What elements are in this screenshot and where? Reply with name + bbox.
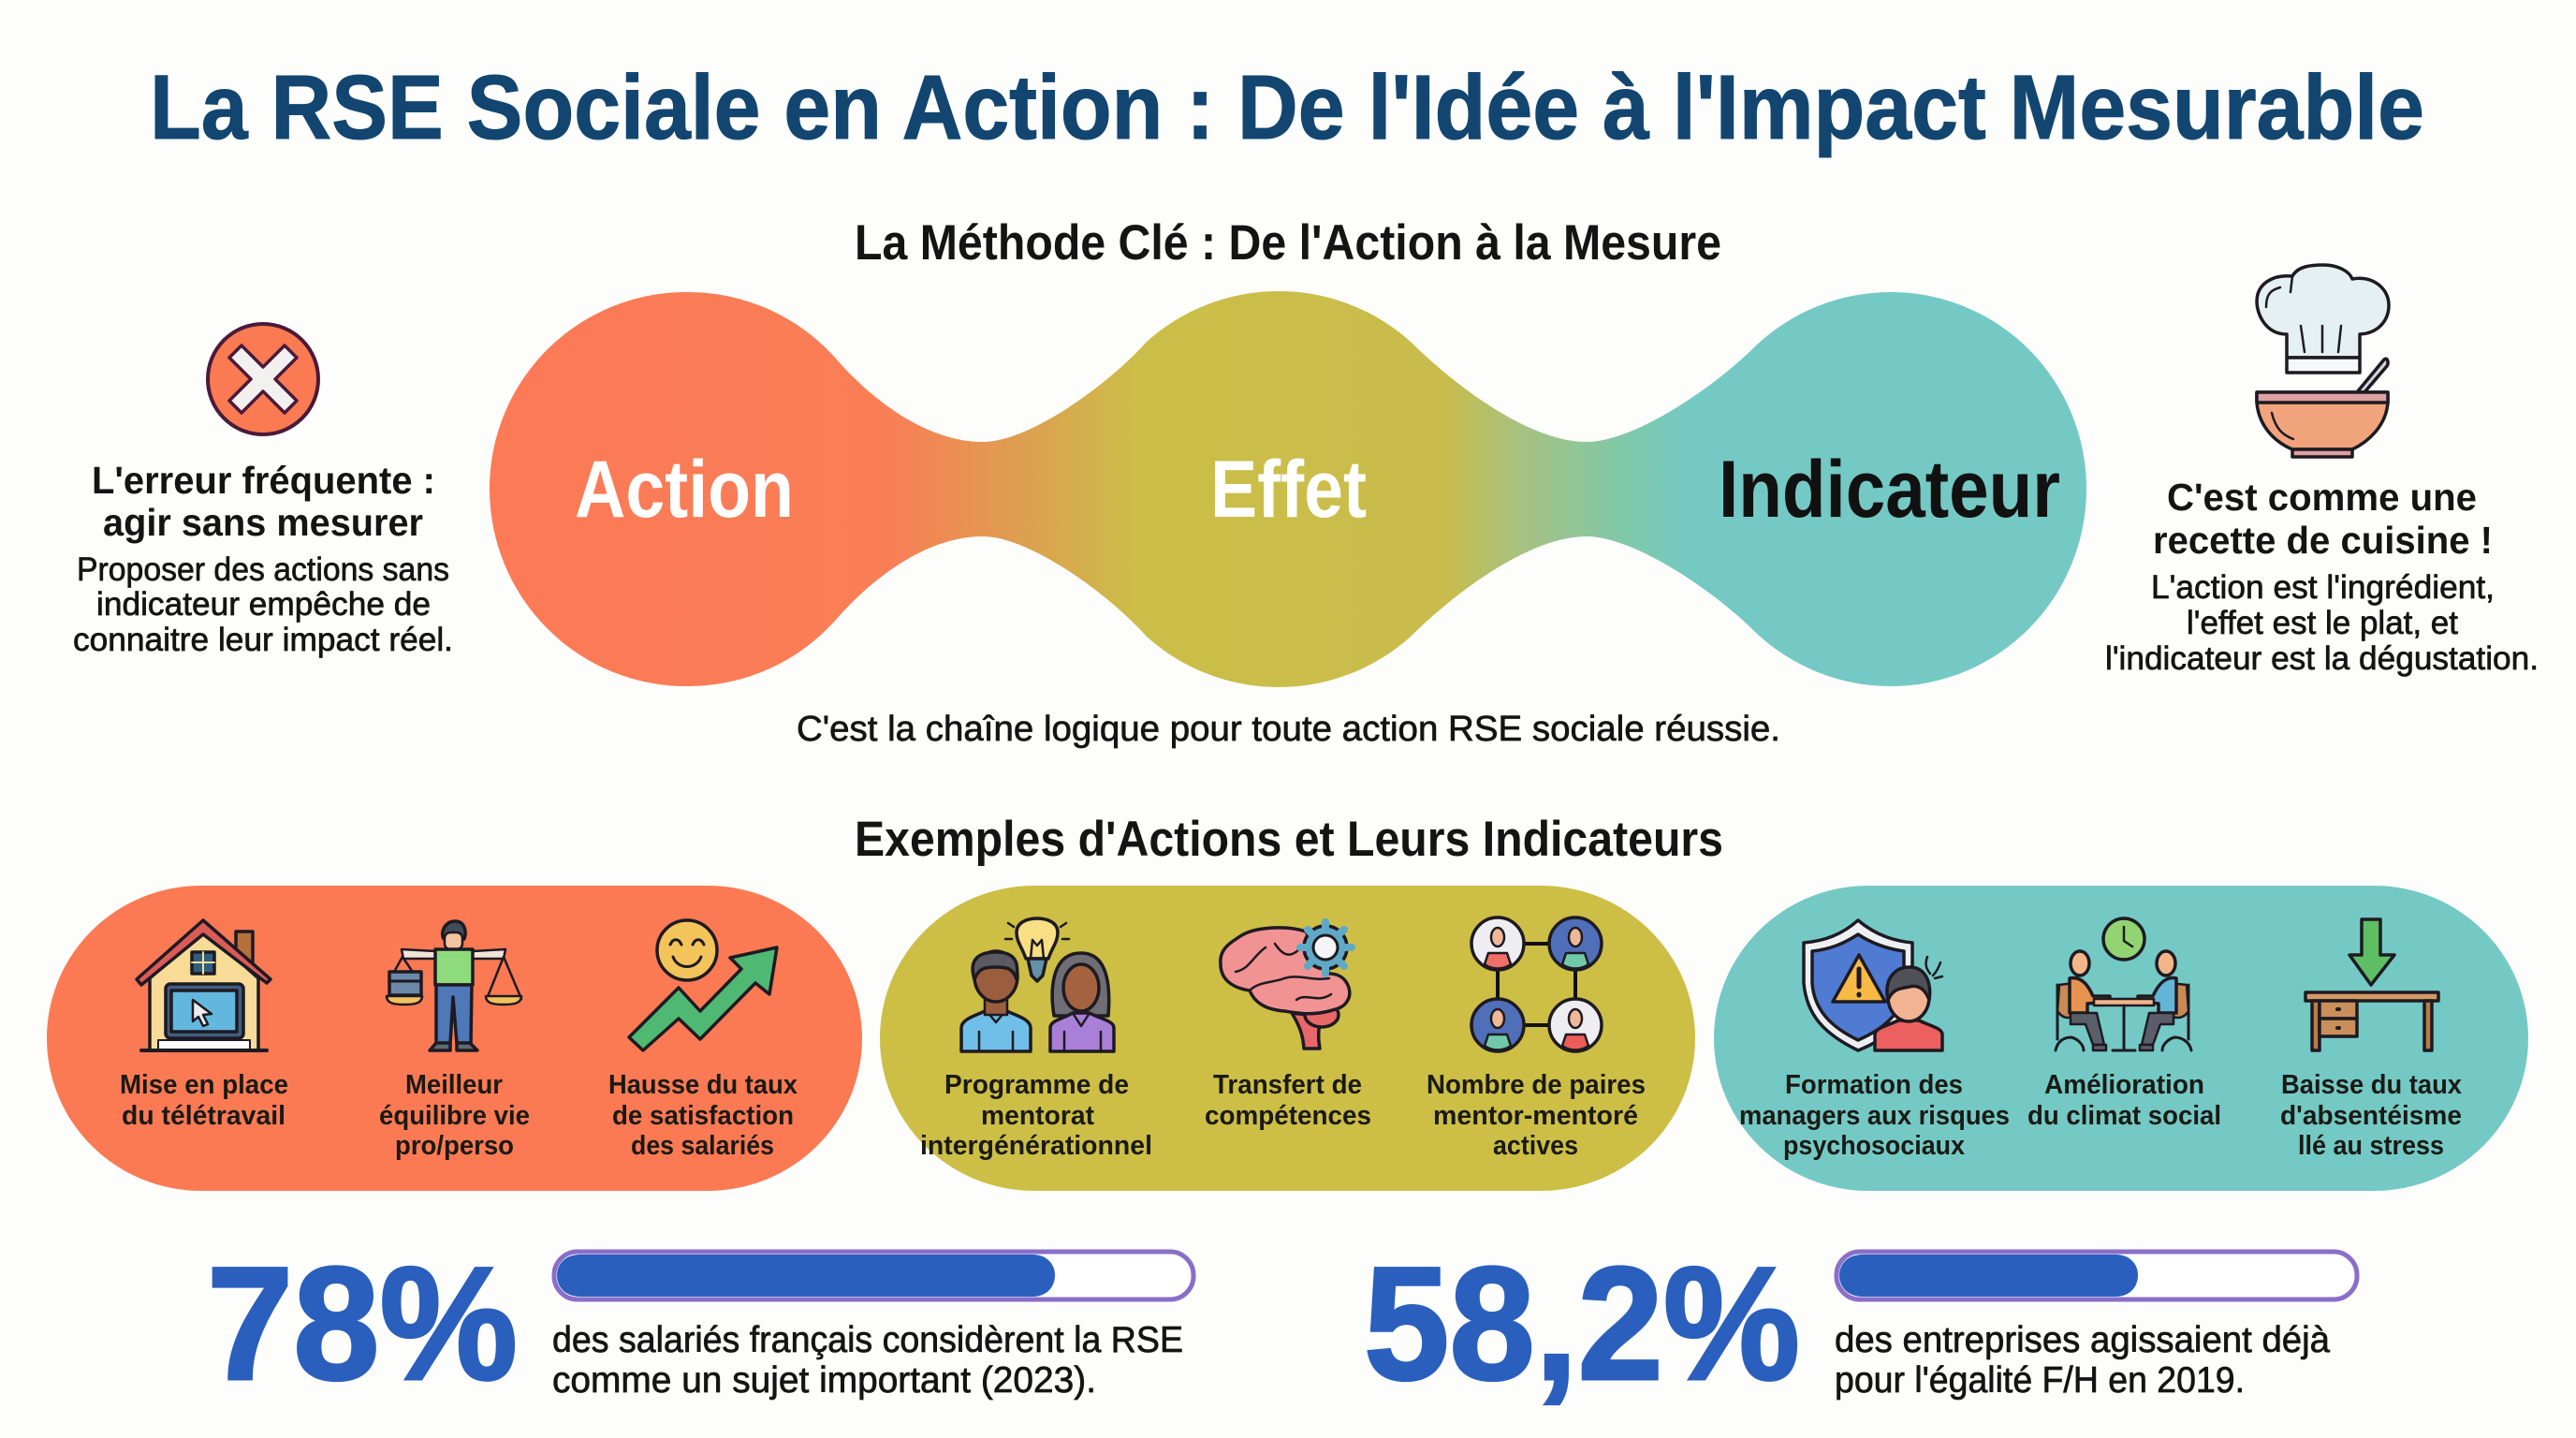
text: 78% description: comme un sujet important (2023). — [552, 1360, 1096, 1401]
label: mentoring programme: Programme de — [944, 1070, 1129, 1100]
progress bar: 78% — [554, 1252, 1193, 1299]
label: manager training — [1739, 1070, 2010, 1161]
title: La RSE Sociale en Action : De l'Idée à l'Impact Mesurable — [150, 56, 2424, 158]
label: action: Action — [575, 445, 794, 535]
label: work life balance: pro/perso — [395, 1131, 514, 1161]
label: manager training: Formation des — [1785, 1070, 1963, 1100]
panel: psychosocial risk example — [1714, 886, 2528, 1191]
label: mentoring programme: intergénérationnel — [920, 1131, 1152, 1161]
progress bar: 58,2% — [1837, 1252, 2357, 1299]
label: telework: du télétravail — [122, 1101, 285, 1131]
label: skills transfer — [1205, 1070, 1371, 1131]
label: satisfaction: Hausse du taux — [608, 1070, 798, 1100]
text: 78% description — [552, 1320, 1183, 1401]
number: 78%: 78% — [207, 1234, 518, 1414]
text: recipe description: L'action est l'ingrédient, — [2151, 569, 2495, 606]
label: satisfaction: de satisfaction — [612, 1101, 794, 1131]
text: recipe description — [2105, 569, 2539, 677]
chart: action effect indicator chain — [490, 291, 2086, 687]
icon: brain with gear — [1221, 922, 1352, 1049]
heading: error — [92, 459, 435, 544]
label: mentor pairs — [1427, 1070, 1646, 1161]
panel: mentoring example — [880, 886, 1695, 1191]
panel: telework example — [47, 886, 862, 1191]
label: telework — [120, 1070, 288, 1131]
label: work life balance: équilibre vie — [379, 1101, 530, 1131]
heading: examples: Exemples d'Actions et Leurs Indicateurs — [855, 812, 1723, 867]
panel: statistic 78 percent — [207, 1234, 1193, 1414]
label: mentoring programme: mentorat — [981, 1101, 1094, 1131]
icon: smiley and rising arrow — [629, 920, 777, 1050]
label: social climate — [2027, 1070, 2221, 1131]
label: manager training: managers aux risques — [1739, 1101, 2010, 1131]
label: work life balance — [379, 1070, 530, 1161]
icon: meeting at a table with clock — [2056, 918, 2191, 1050]
label: social climate: Amélioration — [2044, 1070, 2204, 1100]
text: 58,2% description — [1835, 1320, 2330, 1401]
text: error description — [73, 551, 453, 658]
label: effect: Effet — [1210, 445, 1367, 535]
heading: recipe: C'est comme une — [2167, 476, 2477, 519]
icon: house with laptop — [137, 920, 271, 1050]
label: indicator: Indicateur — [1719, 445, 2060, 535]
label: absenteeism — [2280, 1070, 2462, 1161]
label: mentor pairs: mentor-mentoré — [1433, 1101, 1638, 1131]
icon: down arrow and desk — [2305, 919, 2438, 1050]
text: 78% description: des salariés français considèrent la RSE — [552, 1320, 1183, 1360]
text: chain caption: C'est la chaîne logique pour toute action RSE sociale réussie. — [797, 710, 1780, 749]
text: recipe description: l'effet est le plat, et — [2187, 605, 2458, 641]
number: 58,2%: 58,2% — [1364, 1234, 1800, 1414]
label: mentor pairs: Nombre de paires — [1427, 1070, 1646, 1100]
panel: statistic 58,2 percent — [1364, 1234, 2357, 1414]
label: satisfaction — [608, 1070, 798, 1161]
heading: recipe: recette de cuisine ! — [2153, 519, 2493, 562]
label: mentor pairs: actives — [1493, 1131, 1578, 1161]
text: error description: connaitre leur impact réel. — [73, 622, 453, 658]
panel: common error — [73, 324, 453, 658]
label: skills transfer: Transfert de — [1213, 1070, 1362, 1100]
heading: recipe — [2153, 476, 2493, 562]
heading: error: L'erreur fréquente : — [92, 459, 435, 502]
label: satisfaction: des salariés — [631, 1131, 774, 1161]
icon: person balancing scales — [387, 921, 521, 1050]
text: error description: indicateur empêche de — [96, 586, 431, 623]
icon: cross in circle — [208, 324, 318, 434]
text: recipe description: l'indicateur est la dégustation. — [2105, 640, 2539, 677]
label: social climate: du climat social — [2027, 1101, 2221, 1131]
label: mentoring programme — [920, 1070, 1152, 1161]
label: work life balance: Meilleur — [405, 1070, 503, 1100]
icon: shield, warning and manager — [1804, 920, 1942, 1050]
icon: chef hat and bowl — [2257, 265, 2389, 457]
label: absenteeism: llé au stress — [2298, 1131, 2444, 1161]
text: 58,2% description: des entreprises agissaient déjà — [1835, 1320, 2330, 1360]
label: absenteeism: d'absentéisme — [2280, 1101, 2462, 1131]
label: absenteeism: Baisse du taux — [2281, 1070, 2462, 1100]
text: error description: Proposer des actions sans — [77, 551, 449, 588]
icon: mentor pair with light bulb — [961, 918, 1114, 1051]
heading: error: agir sans mesurer — [103, 501, 423, 544]
icon: mentor network — [1471, 917, 1602, 1051]
label: telework: Mise en place — [120, 1070, 288, 1100]
panel: recipe analogy — [2105, 265, 2539, 677]
heading: method: La Méthode Clé : De l'Action à la Mesure — [855, 215, 1721, 271]
text: 58,2% description: pour l'égalité F/H en 2019. — [1835, 1360, 2245, 1401]
label: skills transfer: compétences — [1205, 1101, 1371, 1131]
label: manager training: psychosociaux — [1783, 1131, 1965, 1161]
